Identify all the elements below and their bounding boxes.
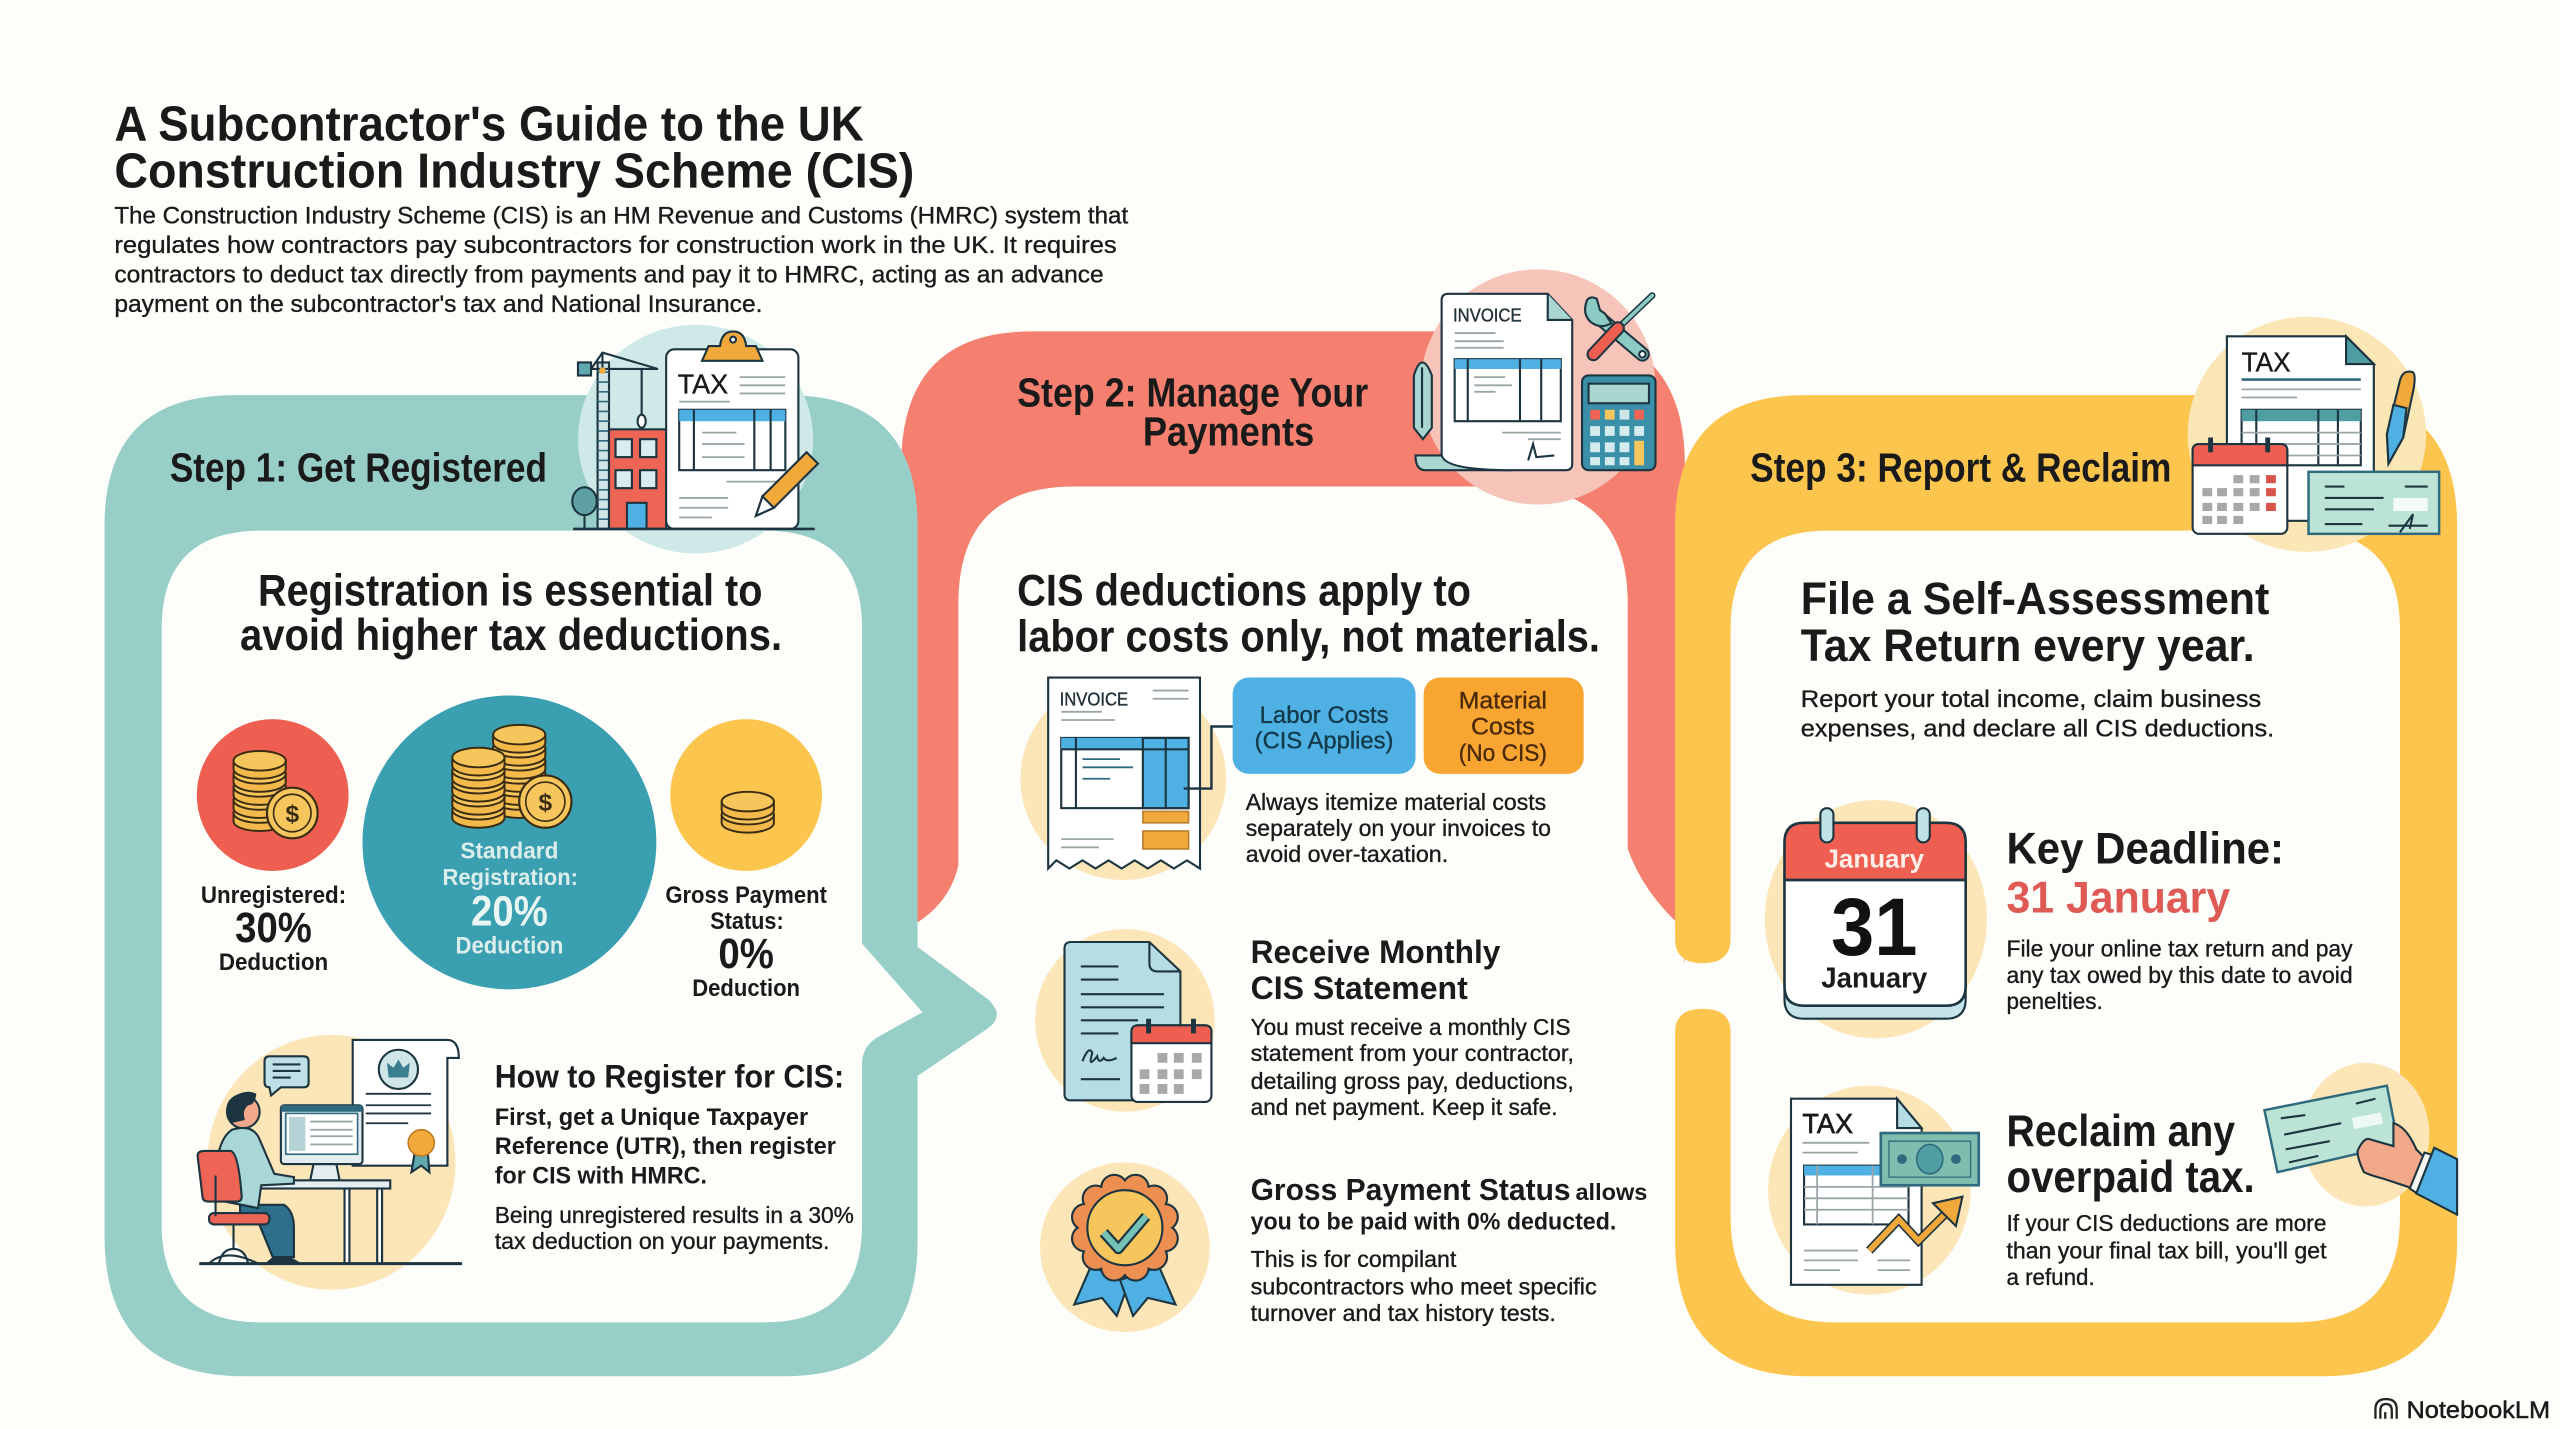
text: itemise materials: Always itemize material costs xyxy=(1246,789,1546,815)
icon: yellow circle with coins xyxy=(670,719,822,871)
heading: file self-assessment: Tax Return every year. xyxy=(1801,620,2255,671)
text: reclaim overpaid tax: overpaid tax. xyxy=(2006,1153,2255,1202)
icon: red circle with coins xyxy=(197,719,349,871)
text: how to register: Reference (UTR), then register xyxy=(495,1133,836,1160)
title: A Subcontractor's Guide to the UK xyxy=(114,97,864,151)
stat: teal circle, standard registration 20% xyxy=(362,695,656,989)
intro paragraph: The Construction Industry Scheme (CIS) is an HM Revenue and Customs (HMRC) system that xyxy=(114,203,1128,230)
heading: step 2: Payments xyxy=(1143,409,1314,455)
icon: 31 January calendar: January xyxy=(1821,963,1927,995)
text: monthly statement: and net payment. Keep it safe. xyxy=(1251,1094,1558,1120)
pen xyxy=(2387,372,2415,464)
icon: tax form with cash and rising arrow: TAX xyxy=(1802,1108,1853,1139)
crane xyxy=(578,353,658,529)
text: key deadline xyxy=(2006,825,2353,1014)
cheque xyxy=(2309,472,2439,534)
label: material costs: Material xyxy=(1459,689,1547,715)
heading: step 2 xyxy=(1017,370,1368,455)
text: monthly statement xyxy=(1251,933,1574,1120)
desk xyxy=(258,1180,390,1264)
tax form: TAX xyxy=(2242,346,2291,377)
text: gross payment status: allows xyxy=(1575,1179,1647,1205)
heading: registration statement: Registration is essential to xyxy=(258,567,762,616)
heading: registration statement: avoid higher tax deductions. xyxy=(240,611,782,660)
text: itemise materials xyxy=(1246,789,1551,867)
certificate xyxy=(353,1040,459,1172)
icon: 31 January calendar: January xyxy=(1824,844,1925,874)
stat: gross payment 0%: 0% xyxy=(718,930,774,977)
stat: teal circle, standard registration 20%: $ xyxy=(539,790,553,817)
calendar xyxy=(2193,438,2287,534)
icon: tax form with cash and rising arrow xyxy=(1768,1086,1979,1295)
heading: step 2: Step 2: Manage Your xyxy=(1017,370,1368,416)
intro paragraph: regulates how contractors pay subcontractors for construction work in the UK. It requires xyxy=(114,232,1117,259)
logo: NotebookLM: NotebookLM xyxy=(2406,1397,2550,1424)
text: monthly statement: Receive Monthly xyxy=(1251,933,1500,970)
stat: gross payment 0% xyxy=(665,883,827,1002)
heading: registration statement xyxy=(240,567,782,660)
text: how to register: for CIS with HMRC. xyxy=(495,1163,707,1190)
panel: step 3 yellow frame xyxy=(1675,395,2457,1376)
text: itemise materials: avoid over-taxation. xyxy=(1246,841,1448,867)
text: key deadline: File your online tax return and pay xyxy=(2006,936,2353,962)
calculator xyxy=(1582,375,1655,470)
text: gross payment status: subcontractors who meet specific xyxy=(1251,1274,1597,1300)
stat: teal circle, standard registration 20%: 20% xyxy=(471,888,548,935)
label: labor costs: (CIS Applies) xyxy=(1255,729,1393,755)
text: reclaim overpaid tax xyxy=(2006,1107,2327,1290)
stat: unregistered 30%: Deduction xyxy=(219,950,328,976)
icon: itemised invoice: INVOICE xyxy=(1060,688,1128,709)
heading: step 3: Step 3: Report & Reclaim xyxy=(1750,445,2171,491)
panel: step 2 coral frame xyxy=(901,331,1685,963)
text: gross payment status: you to be paid with 0% deducted. xyxy=(1251,1208,1616,1235)
heading: CIS deductions: labor costs only, not materials. xyxy=(1017,612,1600,661)
icon: itemised invoice xyxy=(1020,678,1234,880)
stat: gross payment 0%: Deduction xyxy=(692,976,800,1002)
icon: approved badge xyxy=(1040,1162,1210,1332)
heading: file self-assessment xyxy=(1801,573,2274,742)
text: key deadline: Key Deadline: xyxy=(2006,825,2284,874)
stat: unregistered 30% xyxy=(201,883,346,976)
building xyxy=(609,429,666,529)
text: how to register xyxy=(495,1057,854,1254)
stat: unregistered 30%: 30% xyxy=(235,904,312,951)
text: monthly statement: detailing gross pay, deductions, xyxy=(1251,1068,1574,1094)
text: how to register: tax deduction on your payments. xyxy=(495,1228,829,1254)
text: reclaim overpaid tax: Reclaim any xyxy=(2006,1107,2235,1156)
heading: step 1: Step 1: Get Registered xyxy=(170,445,547,491)
stat: unregistered 30%: Unregistered: xyxy=(201,883,346,909)
icon: 31 January calendar xyxy=(1765,800,1987,1038)
tree xyxy=(572,487,597,529)
icon: tax form, calendar, cheque and pen xyxy=(2188,317,2439,552)
tax form xyxy=(2227,336,2374,521)
icon: person registering at a computer xyxy=(198,1035,462,1290)
label: material costs xyxy=(1424,678,1584,774)
clipboard xyxy=(666,331,798,529)
label: material costs: (No CIS) xyxy=(1459,741,1547,767)
label: labor costs xyxy=(1233,678,1416,774)
intro paragraph: payment on the subcontractor's tax and National Insurance. xyxy=(114,291,762,318)
icon: invoice, tools and calculator xyxy=(1414,269,1655,504)
text: reclaim overpaid tax: than your final tax bill, you'll get xyxy=(2006,1238,2327,1264)
text: how to register: Being unregistered results in a 30% xyxy=(495,1202,854,1228)
title: Construction Industry Scheme (CIS) xyxy=(114,145,914,199)
icon: red circle with coins: $ xyxy=(285,801,299,828)
heading: file self-assessment: expenses, and declare all CIS deductions. xyxy=(1801,715,2274,742)
speech bubble xyxy=(265,1056,309,1095)
icon: hand holding refund cheque xyxy=(2264,1063,2457,1215)
text: how to register: How to Register for CIS: xyxy=(495,1057,844,1094)
heading: CIS deductions xyxy=(1017,567,1600,661)
intro paragraph: contractors to deduct tax directly from payments and pay it to HMRC, acting as an advance xyxy=(114,261,1104,288)
heading: file self-assessment: Report your total income, claim business xyxy=(1801,686,2261,713)
icon: monthly statement and calendar xyxy=(1035,929,1215,1112)
text: gross payment status: Gross Payment Status xyxy=(1251,1174,1571,1207)
invoice: INVOICE xyxy=(1453,305,1522,326)
stat: teal circle, standard registration 20%: Deduction xyxy=(456,933,563,959)
label: material costs: Costs xyxy=(1471,715,1535,741)
tools xyxy=(1585,295,1652,358)
stat: gross payment 0%: Status: xyxy=(710,909,784,935)
text: reclaim overpaid tax: If your CIS deductions are more xyxy=(2006,1210,2326,1236)
title xyxy=(114,97,914,199)
text: reclaim overpaid tax: a refund. xyxy=(2006,1264,2095,1290)
stat: gross payment 0%: Gross Payment xyxy=(665,883,827,909)
stat: teal circle, standard registration 20%: Registration: xyxy=(442,864,578,890)
monitor xyxy=(281,1105,362,1180)
text: monthly statement: You must receive a monthly CIS xyxy=(1251,1014,1571,1040)
text: how to register: First, get a Unique Taxpayer xyxy=(495,1104,809,1131)
text: gross payment status: This is for compilant xyxy=(1251,1246,1457,1272)
text: gross payment status xyxy=(1251,1174,1647,1326)
invoice xyxy=(1416,294,1572,470)
heading: CIS deductions: CIS deductions apply to xyxy=(1017,567,1471,616)
icon: crane, building and tax clipboard xyxy=(572,325,818,553)
text: itemise materials: separately on your invoices to xyxy=(1246,815,1551,841)
pen xyxy=(1414,362,1432,439)
text: key deadline: penelties. xyxy=(2006,988,2103,1014)
text: key deadline: any tax owed by this date to avoid xyxy=(2006,962,2353,988)
intro paragraph xyxy=(114,203,1128,318)
clipboard: TAX xyxy=(678,368,728,399)
pencil xyxy=(756,452,818,516)
text: monthly statement: statement from your contractor, xyxy=(1251,1040,1574,1066)
stat: teal circle, standard registration 20%: Standard xyxy=(460,838,558,864)
text: monthly statement: CIS Statement xyxy=(1251,969,1468,1006)
heading: file self-assessment: File a Self-Assessment xyxy=(1801,573,2269,624)
text: gross payment status: turnover and tax history tests. xyxy=(1251,1300,1556,1326)
icon: 31 January calendar: 31 xyxy=(1831,882,1918,973)
text: key deadline: 31 January xyxy=(2006,874,2231,923)
label: labor costs: Labor Costs xyxy=(1260,703,1389,729)
person xyxy=(198,1092,302,1264)
panel: step 1 teal frame xyxy=(105,395,997,1376)
